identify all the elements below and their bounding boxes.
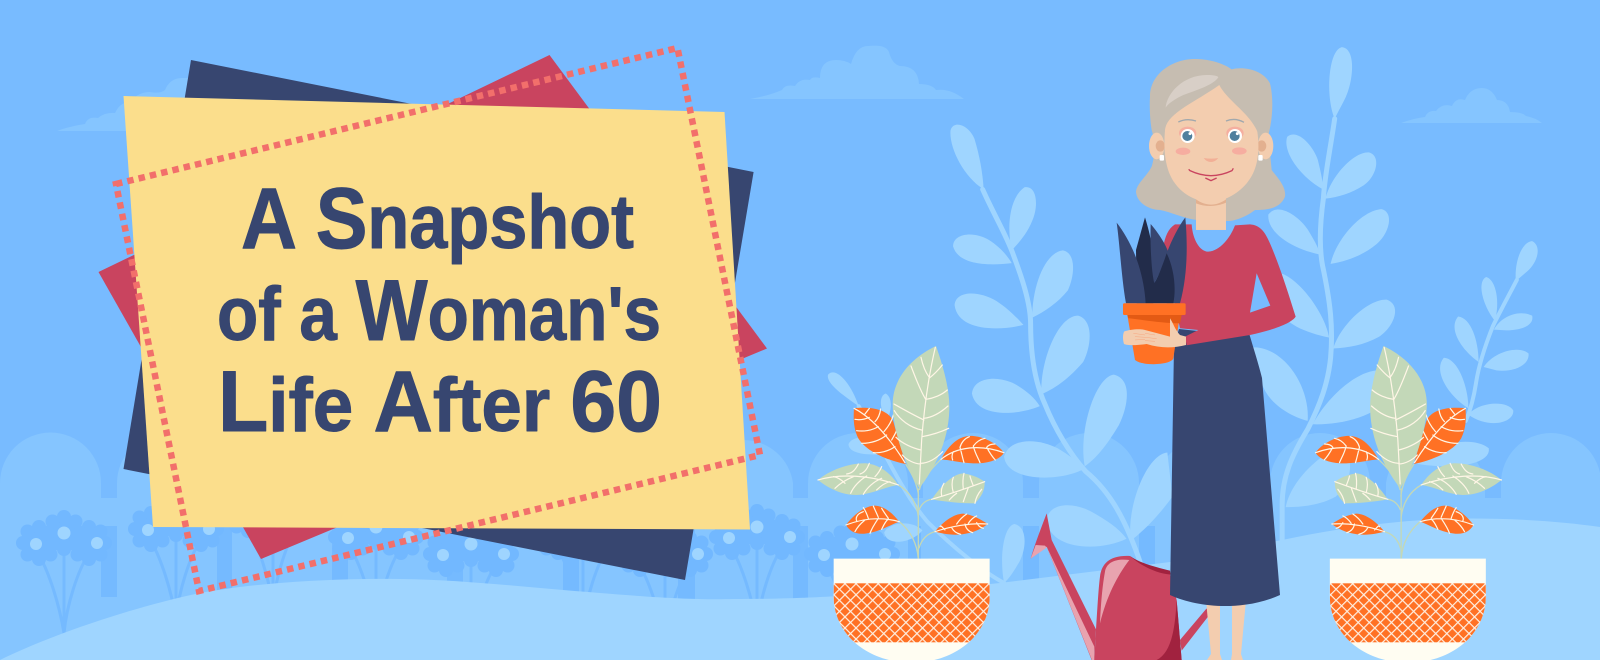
cloud: centre	[750, 46, 964, 99]
watering can	[1031, 513, 1209, 660]
woman	[1117, 59, 1296, 660]
title card stack	[98, 48, 767, 591]
dotted frame	[116, 48, 760, 591]
chin shadow	[1196, 199, 1226, 206]
hair	[1136, 59, 1285, 221]
skirt	[1170, 329, 1280, 606]
pot shadow	[1127, 315, 1182, 323]
potted plant: left	[818, 346, 1004, 660]
title: of a Woman's	[217, 263, 661, 359]
eyes	[1179, 127, 1244, 143]
can spout	[1031, 513, 1096, 660]
dark leaf front	[1146, 253, 1175, 303]
hair highlight	[1166, 75, 1218, 108]
navy back sheet	[124, 60, 754, 580]
title: Life After 60	[218, 354, 662, 450]
nose	[1204, 158, 1218, 162]
can highlight	[1100, 560, 1129, 623]
can shading	[1130, 556, 1182, 660]
cheeks	[1176, 147, 1247, 155]
background: flowers	[16, 482, 900, 654]
hands	[1123, 318, 1186, 347]
cloud: left	[57, 78, 230, 131]
face	[1164, 85, 1258, 202]
can body	[1094, 556, 1182, 660]
background vine: far right	[1440, 241, 1538, 423]
dark leaves back	[1136, 217, 1156, 303]
background vine: behind left plant	[828, 372, 1004, 583]
legs	[1206, 600, 1246, 660]
can handle	[1180, 608, 1209, 651]
pot body	[1127, 315, 1180, 364]
title	[217, 171, 662, 450]
background: arches and garden wall	[0, 432, 1600, 660]
ears	[1149, 133, 1273, 161]
background: fence posts	[101, 526, 1155, 606]
eyebrows	[1178, 119, 1244, 122]
pot rim	[1123, 303, 1186, 315]
spout highlight	[1031, 545, 1094, 660]
cloud: right	[1401, 88, 1542, 123]
background vine: left tall	[950, 125, 1172, 583]
neck	[1196, 197, 1226, 230]
navy leaves	[1117, 217, 1187, 303]
potted plant in hands	[1117, 217, 1187, 364]
hill	[0, 518, 1600, 660]
shirt	[1163, 224, 1296, 345]
mouth	[1189, 168, 1233, 181]
finger lines	[1133, 333, 1157, 341]
yellow title card	[124, 96, 750, 530]
background vine: right tall	[1253, 47, 1489, 543]
title: A Snapshot	[241, 171, 634, 267]
red back sheet	[98, 55, 767, 559]
potted plant: right	[1316, 346, 1502, 660]
